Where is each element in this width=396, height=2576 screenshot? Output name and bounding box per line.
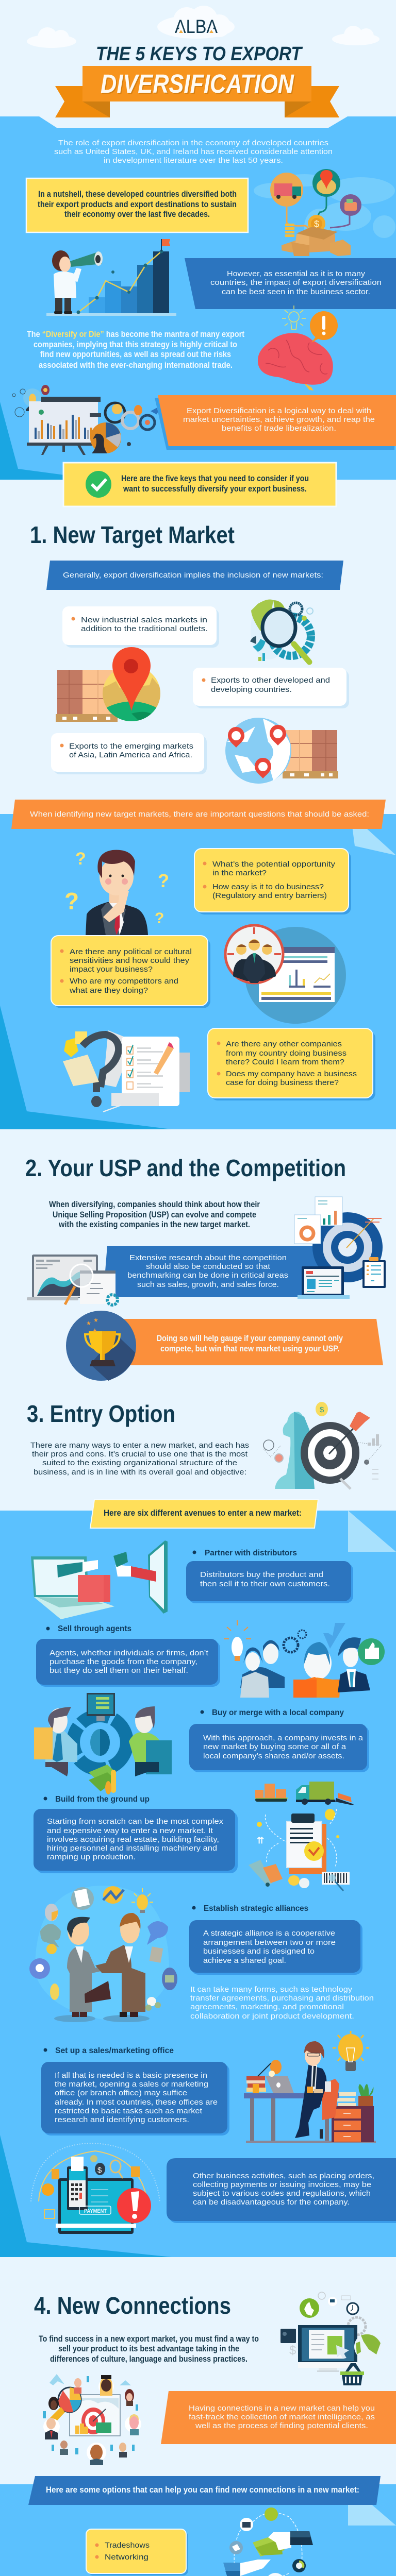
text: new connections intro: sell your product to its best advantage taking in the — [58, 2344, 239, 2353]
text: USP intro — [49, 1199, 260, 1229]
banner: however: can be best seen in the business sector. — [222, 287, 370, 296]
card: sensitivities and competitors — [51, 936, 210, 1008]
icon: online store monitor: $ — [289, 2344, 296, 2358]
text: entry option intro — [30, 1441, 249, 1477]
banner: extensive research — [103, 1246, 335, 1297]
card: other business activities — [167, 2158, 396, 2223]
icon: target audience and report — [225, 925, 346, 1024]
option: build from the ground up — [34, 1795, 238, 1873]
text: forms of strategic alliance: transfer agreements, purchasing and distribution — [190, 1994, 374, 2003]
card: other companies: there? Could I learn from them? — [226, 1058, 344, 1066]
icon: chess piece and dart target — [263, 1402, 382, 1489]
callout: in a nutshell: In a nutshell, these developed countries diversified both — [38, 189, 237, 199]
intro text — [54, 139, 333, 165]
icon: man with telescope and rising chart — [46, 239, 176, 316]
blue panel: new connections background — [0, 2484, 396, 2576]
text: forms of strategic alliance: It can take many forms, such as technology — [190, 1985, 353, 1994]
card: other companies: Does my company have a business — [226, 1070, 357, 1078]
icon: trophy: ★ — [86, 1320, 91, 1327]
banner: gauge compete: Doing so will help gauge if your company cannot only — [157, 1333, 343, 1343]
card: sensitivities and competitors: Who are my competitors and — [70, 977, 178, 986]
option: sales office: office (or branch office) may suffice — [55, 2089, 187, 2097]
option: sales office: research and identifying customers. — [55, 2115, 189, 2124]
option: establish strategic alliances: achieve a shared goal. — [203, 1956, 286, 1965]
option: buy or merge — [189, 1708, 369, 1772]
option: sales office: restricted to basic tasks such as market — [55, 2107, 203, 2115]
heading: section 4: 4. New Connections — [34, 2292, 231, 2319]
intro text: in development literature over the last 50 years. — [104, 156, 283, 165]
banner: important questions: When identifying new target markets, there are important questions that should be asked: — [30, 810, 369, 819]
callout: five keys: want to successfully diversify your export business. — [123, 484, 307, 494]
icon: network of people and target — [43, 2374, 141, 2465]
option: partner with distributors: Partner with distributors — [205, 1549, 297, 1557]
text: USP intro: Unique Selling Proposition (USP) can evolve and compete — [53, 1210, 256, 1219]
banner: six avenues — [90, 1500, 318, 1528]
banner: extensive research: such as sales, growth, and sales force. — [137, 1280, 279, 1289]
icon: money exchange hands — [223, 2507, 313, 2576]
icon: two partners and gear — [34, 1693, 172, 1794]
icon: businessmen handshake — [29, 1886, 177, 2022]
option: partner with distributors: Distributors buy the product and — [200, 1570, 323, 1579]
card: other companies: case for doing business there? — [226, 1078, 339, 1087]
card: other business activities: collecting payments or issuing invoices, may be — [193, 2180, 371, 2189]
card: other companies: from my country doing business — [226, 1049, 346, 1058]
banner: new markets — [46, 561, 343, 590]
icon: trophy: ★ — [93, 1317, 98, 1324]
option: sell through agents — [36, 1624, 220, 1687]
icon: thinking businessman: ? — [158, 870, 169, 891]
icon: trophy — [66, 1311, 136, 1381]
icon: payment alert: PAYMENT — [84, 2208, 107, 2214]
ribbon: diversification — [55, 66, 339, 117]
icon: chess piece and dart target: $ — [320, 1405, 324, 1414]
banner: however: However, as essential as it is to many — [227, 269, 366, 278]
option: partner with distributors — [186, 1549, 353, 1603]
icon: target with reports — [294, 1197, 386, 1299]
banner: six avenues: Here are six different avenues to enter a new market: — [104, 1508, 302, 1518]
blue panel: introduction background — [0, 116, 396, 480]
card: other companies: Are there any other companies — [226, 1040, 342, 1048]
card: opportunity and ease: How easy is it to do business? — [212, 883, 324, 891]
option: establish strategic alliances: A strategic alliance is a cooperative — [203, 1929, 335, 1938]
card: other business activities: subject to various codes and regulations, which — [193, 2189, 371, 2198]
text: forms of strategic alliance: agreements, marketing, and promotional — [190, 2003, 344, 2011]
card: other developed countries: Exports to other developed and — [211, 676, 330, 685]
text: diversify or die — [27, 329, 244, 370]
icon: location pin with boxes — [56, 647, 161, 724]
callout: five keys — [63, 463, 336, 506]
option: build from the ground up: involves acquiring real estate, building facility, — [47, 1835, 219, 1844]
option: sales office: already. In most countries, these offices are — [55, 2098, 218, 2107]
callout: five keys: Here are the five keys that you need to consider if you — [121, 473, 309, 483]
icon: globe with pins and boxes — [225, 718, 338, 784]
text: diversify or die: The “Diversify or Die” has become the mantra of many export — [27, 329, 244, 339]
icon: green check — [86, 471, 111, 498]
card: sensitivities and competitors: what are they doing? — [69, 986, 148, 995]
icon: thinking businessman: ? — [155, 910, 164, 927]
option: sales office: Set up a sales/marketing office — [55, 2046, 174, 2055]
heading: section 1: 1. New Target Market — [30, 521, 235, 548]
icon: world map with export goods: $ — [314, 219, 319, 229]
option: establish strategic alliances: arrangement between two or more — [203, 1938, 336, 1947]
banner: connections fast-track: fast-track the collection of market intelligence, as — [189, 2413, 375, 2421]
text: entry option intro: There are many ways to enter a new market, and each has — [30, 1441, 249, 1450]
card: other business activities: can be disadvantageous for the company. — [193, 2198, 350, 2207]
ribbon: diversification: DIVERSIFICATION — [102, 70, 295, 99]
icon: office worker at desk — [244, 2031, 376, 2143]
option: buy or merge: new market by buying some or all of a — [203, 1742, 346, 1751]
banner: export diversification logical way: Export Diversification is a logical way to deal with — [187, 406, 371, 415]
text: new connections intro: To find success in a new export market, you must find a way to — [39, 2334, 259, 2344]
option: build from the ground up: Starting from scratch can be the most complex — [47, 1817, 224, 1826]
callout: in a nutshell — [26, 178, 248, 232]
ribbon: diversification: DIVERSIFICATION — [101, 69, 294, 98]
card: other developed countries: developing countries. — [211, 685, 292, 694]
card: opportunity and ease: (Regulatory and entry barriers) — [212, 891, 327, 900]
icon: payment alert — [31, 2143, 160, 2234]
option: partner with distributors: then sell it to their own customers. — [200, 1580, 330, 1588]
banner: export diversification logical way: benefits of trade liberalization. — [222, 424, 336, 433]
card: new industrial sales markets: addition to the traditional outlets. — [81, 624, 208, 633]
card: emerging markets: of Asia, Latin America and Africa. — [69, 751, 192, 759]
icon: trophy: ★ — [92, 1328, 97, 1334]
option: build from the ground up: hiring personnel and installing machinery and — [47, 1844, 217, 1853]
text: USP intro: with the existing companies in the new target market. — [58, 1219, 250, 1229]
icon: presentation board and strategy — [12, 385, 160, 455]
header — [27, 6, 380, 65]
text: new connections intro — [39, 2334, 259, 2364]
option: sell through agents: Agents, whether individuals or firms, don’t — [50, 1649, 209, 1657]
option: build from the ground up: and expensive way to enter a new market. It — [47, 1826, 213, 1835]
intro text: such as United States, UK, and Ireland has received considerable attention — [54, 147, 333, 156]
banner: new markets: Generally, export diversification implies the inclusion of new markets: — [63, 571, 323, 580]
banner: options for new connections: Here are some options that can help you can find new connections in a new market: — [46, 2485, 359, 2495]
card: other companies — [208, 1028, 375, 1100]
logo: ALBA: ALBA — [175, 16, 218, 37]
icon: thinking businessman — [64, 849, 169, 935]
banner: connections fast-track: Having connections in a new market can help you — [189, 2404, 375, 2413]
blue panel: entry options background — [0, 1511, 396, 2257]
text: forms of strategic alliance — [190, 1985, 374, 2021]
option: sell through agents: purchase the goods from the company, — [50, 1657, 197, 1666]
card: sensitivities and competitors: Are there any political or cultural — [70, 947, 192, 956]
card: new industrial sales markets — [62, 606, 219, 648]
option: buy or merge: local company’s shares and/or assets. — [203, 1752, 344, 1760]
card: tradeshows and networking: Networking — [105, 2553, 148, 2562]
card: opportunity and ease — [194, 849, 351, 914]
icon: brain with idea — [258, 306, 338, 391]
option: sales office: the market, opening a sales or marketing — [55, 2080, 208, 2089]
icon: magnifier on globe and gear — [250, 600, 313, 662]
card: sensitivities and competitors: sensitivities and how could they — [70, 956, 190, 965]
option: establish strategic alliances: businesses and is designed to — [203, 1947, 315, 1956]
option: sell through agents: but they do sell them on their behalf. — [50, 1666, 188, 1675]
icon: world map with export goods — [254, 169, 395, 256]
card: emerging markets — [51, 733, 207, 774]
card: sensitivities and competitors: impact your business? — [70, 965, 153, 974]
card: emerging markets: Exports to the emerging markets — [69, 742, 193, 751]
card: tradeshows and networking: Tradeshows — [105, 2541, 150, 2550]
icon: online shopping laptop and tablet — [31, 1540, 168, 1619]
text: diversify or die: associated with the ever-changing international trade. — [39, 360, 233, 370]
heading: section 2: 2. Your USP and the Competition — [25, 1155, 346, 1181]
card: other developed countries — [193, 668, 349, 708]
text: forms of strategic alliance: collaboration or joint product development. — [190, 2012, 354, 2021]
card: opportunity and ease: What’s the potential opportunity — [212, 860, 336, 869]
icon: clouds — [27, 6, 380, 48]
banner: export diversification logical way — [155, 395, 396, 450]
banner: connections fast-track: well as the process of finding potential clients. — [195, 2421, 368, 2430]
banner: gauge compete: compete, but win that new market using your USP. — [160, 1344, 339, 1353]
option: buy or merge: Buy or merge with a local company — [212, 1708, 344, 1717]
card: new industrial sales markets: New industrial sales markets in — [81, 616, 207, 624]
text: diversify or die: companies, implying that this strategy is highly critical to — [34, 340, 237, 349]
text: USP intro: When diversifying, companies should think about how their — [49, 1199, 260, 1209]
icon: payment alert: $ — [97, 2166, 102, 2175]
callout: in a nutshell: their export products and export destinations to sustain — [38, 199, 237, 209]
text: entry option intro: suited to the existing organizational structure of the — [42, 1459, 237, 1467]
banner: extensive research: benchmarking can be done in critical areas — [127, 1271, 288, 1280]
banner: connections fast-track — [161, 2391, 396, 2444]
blue panel: questions background — [0, 814, 396, 1129]
text: entry option intro: their pros and cons. It’s crucial to use one that is the most — [32, 1450, 248, 1459]
banner: extensive research: should also be conducted so that — [146, 1262, 271, 1271]
option: sales office: If all that is needed is a basic presence in — [55, 2071, 207, 2080]
banner: gauge compete — [124, 1319, 383, 1365]
icon: laptop analytics with magnifier — [27, 1255, 118, 1305]
banner: however — [185, 258, 396, 309]
text: new connections intro: differences of culture, language and business practices. — [50, 2354, 248, 2364]
title: THE 5 KEYS TO EXPORT — [96, 43, 303, 65]
icon: support team and thumbs up — [224, 1620, 385, 1698]
icon: thinking businessman: ? — [75, 849, 86, 869]
callout: in a nutshell: their economy over the last five decades. — [64, 209, 210, 219]
option: build from the ground up: ramping up production. — [47, 1853, 136, 1861]
banner: important questions — [11, 800, 386, 829]
heading: section 3: 3. Entry Option — [27, 1400, 175, 1427]
intro text: The role of export diversification in the economy of developed countries — [58, 139, 328, 147]
icon: online store monitor — [280, 2292, 381, 2385]
banner: however: countries, the impact of export diversification — [210, 278, 382, 287]
icon: question mark and checklist — [63, 1030, 190, 1112]
option: build from the ground up: Build from the ground up — [55, 1795, 150, 1804]
banner: options for new connections — [28, 2476, 381, 2505]
banner: extensive research: Extensive research about the competition — [129, 1253, 287, 1262]
option: sales office — [41, 2046, 229, 2136]
option: sell through agents: Sell through agents — [58, 1624, 131, 1633]
option: buy or merge: With this approach, a company invests in a — [203, 1734, 364, 1742]
icon: logistics clipboard and truck — [249, 1782, 354, 1891]
card: other business activities: Other business activities, such as placing orders, — [193, 2172, 374, 2180]
option: establish strategic alliances: Establish strategic alliances — [204, 1904, 308, 1913]
icon: thinking businessman: ? — [64, 888, 79, 914]
text: entry option intro: business, and is in line with its overall goal and objective: — [34, 1468, 246, 1477]
card: opportunity and ease: in the market? — [212, 869, 267, 877]
option: establish strategic alliances — [189, 1904, 362, 1975]
card: tradeshows and networking — [86, 2529, 188, 2575]
icon: logistics clipboard and truck: ⇈ — [257, 1836, 264, 1845]
banner: export diversification logical way: market uncertainties, achieve growth, and reap the — [183, 415, 375, 424]
text: diversify or die: find new opportunities, as well as spread out the risks — [40, 349, 231, 359]
